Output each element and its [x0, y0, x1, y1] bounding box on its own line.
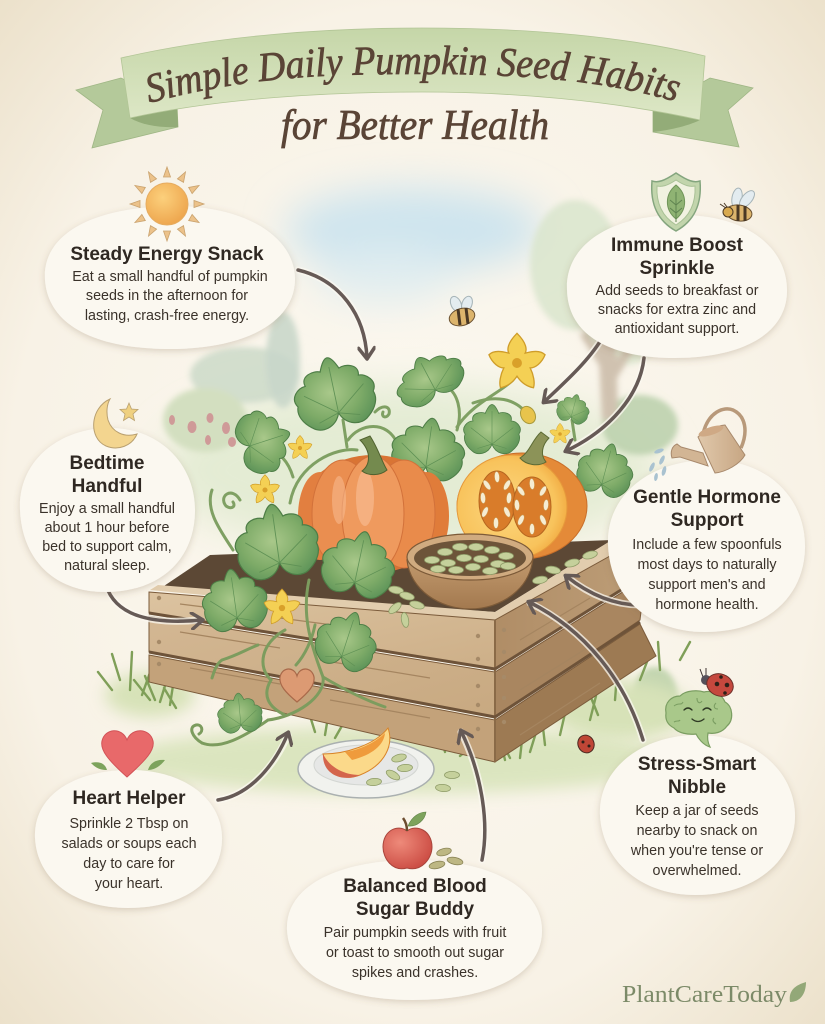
sky wash — [285, 188, 545, 303]
half pumpkin stem — [520, 432, 549, 465]
panel: balanced blood sugar buddy — [287, 860, 542, 1000]
panel: balanced blood sugar buddy: spikes and crashes. — [352, 965, 478, 981]
panel: gentle hormone support: most days to naturally — [637, 557, 777, 573]
ribbon tail left — [76, 78, 178, 148]
panel: bedtime handful: bed to support calm, — [42, 539, 172, 555]
panel: bedtime handful: about 1 hour before — [45, 520, 169, 536]
panel: balanced blood sugar buddy: Sugar Buddy — [356, 899, 475, 920]
icon: moon and star — [94, 399, 138, 448]
panel: balanced blood sugar buddy: or toast to smooth out sugar — [326, 945, 504, 961]
background garden trees and bushes — [160, 200, 678, 723]
panel: heart helper: day to care for — [83, 856, 175, 872]
panel: steady energy snack — [45, 206, 295, 349]
panel: bedtime handful: Enjoy a small handful — [39, 501, 175, 517]
panel: gentle hormone support: hormone health. — [655, 597, 759, 613]
panel: heart helper: salads or soups each — [61, 836, 197, 852]
lower vines and leaves — [192, 499, 401, 745]
icon: watering can — [648, 409, 745, 481]
panel: stress-smart nibble: nearby to snack on — [637, 823, 757, 839]
heart-shaped vine fruit — [280, 669, 314, 702]
grass around the crate — [98, 642, 690, 794]
crate top rim — [150, 540, 625, 622]
water drops — [648, 447, 667, 481]
flower bud — [517, 404, 539, 426]
panel: stress-smart nibble: Stress-Smart — [638, 754, 757, 775]
crate front left boards — [149, 592, 495, 762]
arrows — [106, 270, 644, 860]
icon: bee right — [720, 187, 757, 223]
icon: brain with ladybug — [666, 668, 736, 747]
ribbon fold right — [653, 104, 700, 132]
bush flowers — [169, 413, 236, 447]
panel: immune boost sprinkle — [567, 215, 787, 358]
panel: immune boost sprinkle: antioxidant support. — [615, 321, 739, 337]
ribbon band — [121, 28, 705, 120]
icon: apple and seeds — [383, 812, 464, 870]
panel: bedtime handful — [20, 428, 195, 592]
whole orange pumpkin — [298, 436, 449, 573]
ribbon fold left — [130, 104, 178, 127]
loose seeds on the crate — [387, 550, 598, 628]
panel: gentle hormone support: support men's and — [648, 577, 766, 593]
panel: heart helper — [35, 770, 222, 908]
title line 1: Simple Daily Pumpkin Seed Habits — [147, 45, 680, 102]
panel: gentle hormone support: Support — [671, 510, 744, 531]
icon: bee centre — [447, 295, 477, 329]
panel: steady energy snack: Steady Energy Snack — [70, 244, 264, 265]
crate soil — [158, 540, 612, 612]
icon: shield with leaf — [652, 173, 700, 231]
wooden raised garden crate — [149, 540, 656, 762]
panel: heart helper: Heart Helper — [72, 788, 186, 809]
panel: stress-smart nibble: Keep a jar of seeds — [635, 803, 759, 819]
panel: stress-smart nibble: when you're tense or — [630, 843, 763, 859]
panel: balanced blood sugar buddy: Balanced Blood — [343, 876, 487, 897]
panel: immune boost sprinkle: Add seeds to breakfast or — [596, 283, 759, 299]
panel: immune boost sprinkle: Sprinkle — [640, 258, 714, 279]
panel: steady energy snack: seeds in the afternoon for — [86, 288, 248, 304]
panel: immune boost sprinkle: snacks for extra zinc and — [598, 302, 756, 318]
panel: bedtime handful: Bedtime — [70, 453, 144, 474]
panel: stress-smart nibble: overwhelmed. — [652, 863, 742, 879]
bowl of pumpkin seeds — [407, 534, 533, 609]
icon: heart — [91, 731, 165, 777]
panel: steady energy snack: lasting, crash-free energy. — [85, 308, 249, 324]
panel: gentle hormone support: Gentle Hormone — [633, 487, 781, 508]
panel: heart helper: Sprinkle 2 Tbsp on — [70, 816, 189, 832]
pumpkin stem — [360, 436, 387, 475]
panel: bedtime handful: Handful — [72, 476, 142, 497]
panel: steady energy snack: Eat a small handful of pumpkin — [72, 269, 268, 285]
panel: stress-smart nibble — [600, 735, 795, 895]
plate with pumpkin slice and seeds — [298, 728, 434, 798]
title ribbon — [76, 28, 753, 148]
panel: bedtime handful: natural sleep. — [64, 558, 150, 574]
panel: heart helper: your heart. — [95, 876, 163, 892]
panel: gentle hormone support — [608, 460, 805, 632]
crate front right boards — [495, 546, 656, 762]
logo: PlantCareToday — [622, 982, 787, 1008]
title line 2: for Better Health — [281, 103, 549, 149]
panel: balanced blood sugar buddy: Pair pumpkin seeds with fruit — [324, 925, 506, 941]
seeds on the ground — [435, 771, 460, 792]
icon: small ladybug — [575, 732, 597, 756]
cut pumpkin half — [457, 432, 587, 559]
panel: gentle hormone support: Include a few spoonfuls — [632, 537, 782, 553]
panel: immune boost sprinkle: Immune Boost — [611, 235, 744, 256]
ribbon tail right — [653, 78, 753, 147]
upper vines and leaves — [210, 333, 639, 550]
panel: stress-smart nibble: Nibble — [668, 777, 726, 798]
icon: sun — [130, 167, 204, 241]
